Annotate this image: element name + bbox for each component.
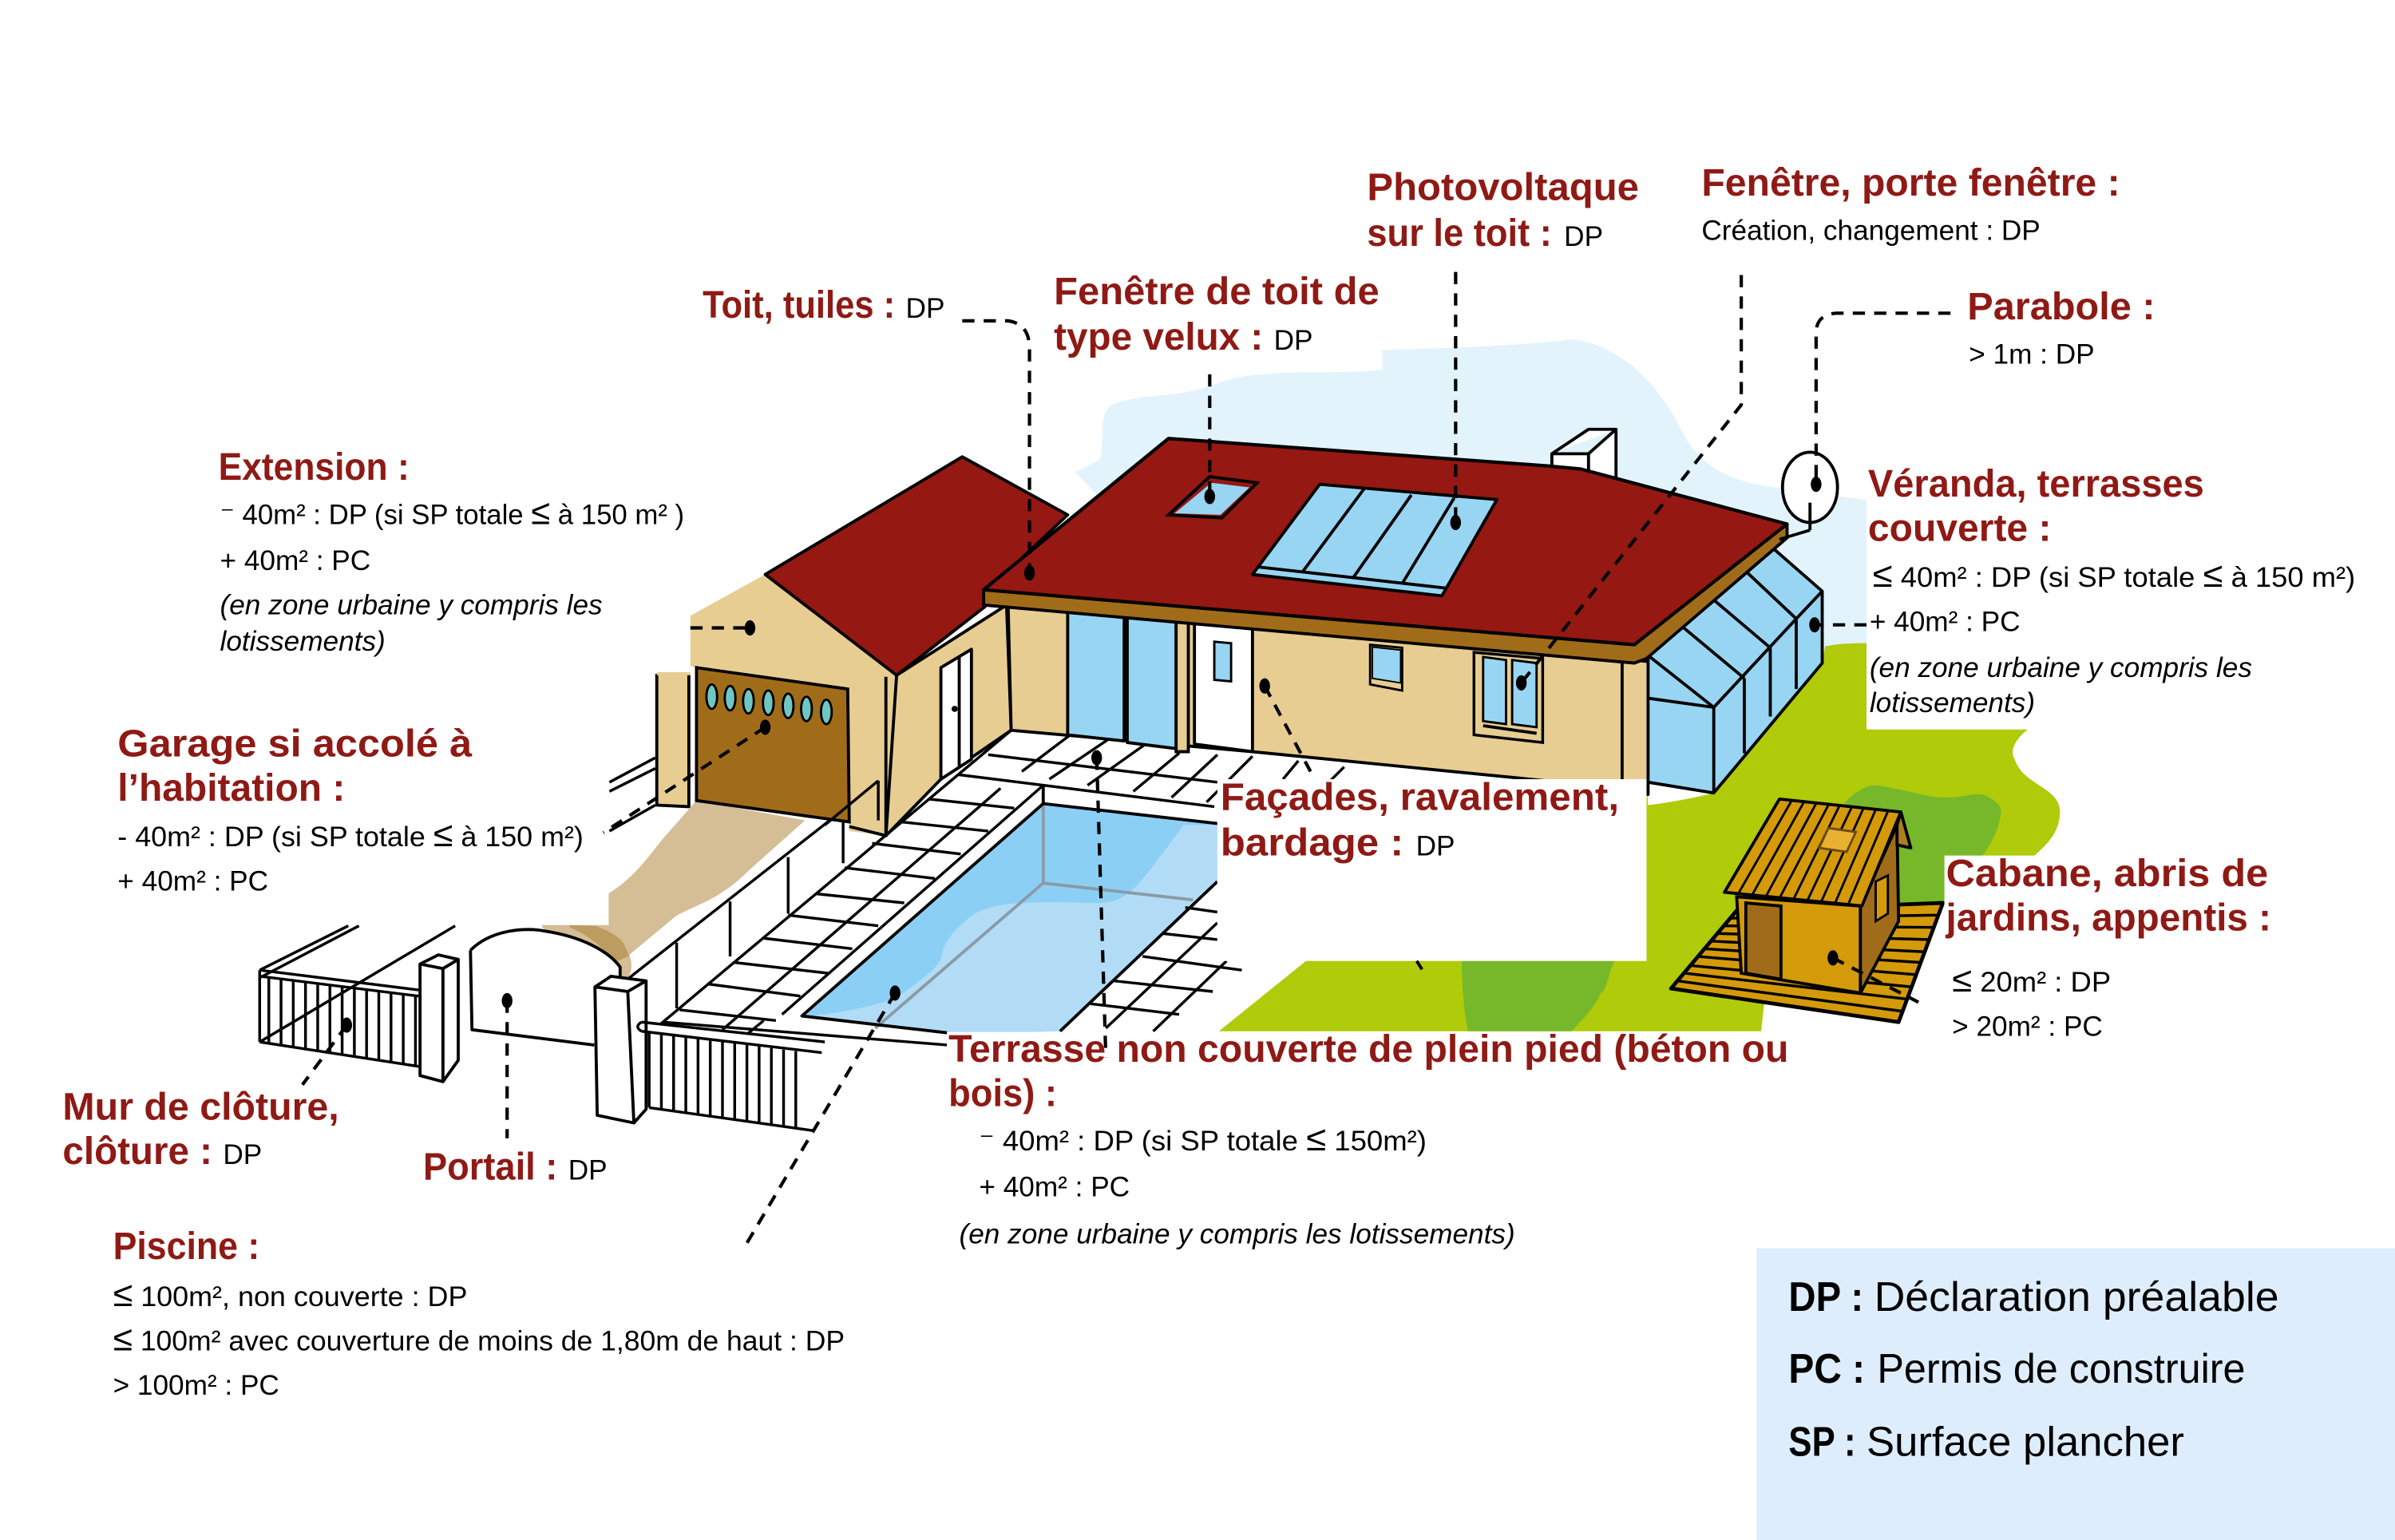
left post (420, 955, 458, 1082)
label: Piscine: Piscine : (113, 1225, 259, 1268)
label: Mur de clôture (62, 1087, 339, 1173)
garage door (696, 667, 849, 822)
label: Garage: Garage si accolé à (117, 722, 473, 765)
label: Façades: DP (1416, 831, 1455, 862)
satellite dish (1779, 452, 1838, 540)
main roof fascia (984, 524, 1787, 663)
label: Véranda: + 40m² : PC (1870, 606, 2021, 637)
label: Extension (219, 446, 684, 657)
label: Véranda: Véranda, terrasses (1868, 463, 2204, 505)
small window (1370, 645, 1402, 691)
right post (595, 976, 646, 1123)
label: Mur de clôture: clôture : (62, 1130, 212, 1173)
garage roof (766, 457, 1067, 675)
label: Véranda (1868, 463, 2355, 719)
low wall corner (825, 781, 878, 825)
label: Extension: ⁻ 40m² : DP (si SP totale ≤ à 150 m² ) (220, 493, 684, 532)
label: Velux: DP (1274, 325, 1313, 356)
label: Fenêtre: Fenêtre, porte fenêtre : (1701, 162, 2120, 204)
label: Portail: DP (568, 1154, 608, 1186)
label: Photovoltaïque: Photovoltaque (1367, 167, 1639, 209)
label: Terrasse: + 40m² : PC (979, 1171, 1130, 1202)
label: Velux: Fenêtre de toit de (1054, 271, 1380, 313)
legend DP: Déclaration préalable (1874, 1273, 2279, 1320)
label: Terrasse: bois) : (948, 1073, 1057, 1115)
label: Cabane: jardins, appentis : (1946, 897, 2271, 939)
right side paving (1091, 908, 1241, 1031)
label: Piscine (113, 1225, 845, 1401)
label: Véranda: ≤ 40m² : DP (si SP totale ≤ à 150 m²) (1873, 556, 2355, 595)
label: Photovoltaïque: DP (1564, 221, 1603, 252)
white mask left of driveway (458, 764, 608, 925)
label: Mur de clôture: Mur de clôture, (62, 1087, 339, 1129)
label: Façades: bardage : (1221, 822, 1403, 865)
left fence (259, 926, 455, 1067)
label: Extension: Extension : (219, 446, 410, 489)
darker lawn patches (1462, 786, 2001, 1031)
big window (1474, 652, 1542, 742)
label: Parabole: Parabole : (1967, 286, 2156, 328)
chimney (1552, 430, 1616, 492)
garden shed (1671, 799, 1943, 1022)
label: Photovoltaïque (1367, 167, 1639, 255)
label: Cabane: > 20m² : PC (1952, 1011, 2103, 1042)
legend SP: SP : (1788, 1419, 1856, 1465)
veranda (1648, 548, 1823, 793)
label: Garage: l’habitation : (117, 767, 345, 810)
low wall along path (629, 782, 878, 1008)
label: Terrasse: (en zone urbaine y compris les lotissements) (960, 1219, 1515, 1250)
label: Mur de clôture: DP (223, 1139, 262, 1170)
label: Piscine: > 100m² : PC (113, 1370, 279, 1401)
garage side post (657, 674, 689, 806)
label: Toit: DP (906, 293, 944, 324)
legend DP: DP : (1788, 1273, 1863, 1320)
label: Cabane: Cabane, abris de (1946, 853, 2268, 895)
front door (1194, 622, 1253, 752)
label: Parabole: > 1m : DP (1969, 338, 2095, 370)
legend PC: PC : (1788, 1345, 1865, 1392)
label: Velux (1054, 271, 1380, 358)
label: Cabane: ≤ 20m² : DP (1952, 960, 2111, 1000)
shed walls (1736, 897, 1860, 993)
label: Terrasse (948, 1028, 1788, 1250)
label: Velux: type velux : (1054, 316, 1263, 358)
label: Extension: + 40m² : PC (220, 545, 370, 576)
gate arch and opening (470, 929, 620, 1045)
right fence (638, 1022, 825, 1130)
label: Garage (117, 722, 584, 897)
house wall (1008, 605, 1648, 794)
label: Fenêtre (1701, 162, 2120, 246)
solar panels (1253, 485, 1497, 596)
house (984, 430, 1823, 794)
white text backgrounds (947, 466, 2395, 1261)
label: Garage: - 40m² : DP (si SP totale ≤ à 150 m²) (117, 815, 584, 854)
label: Véranda: couverte : (1868, 507, 2052, 549)
side road lines (609, 758, 655, 831)
label: Photovoltaïque: sur le toit : (1367, 212, 1552, 255)
door windows (707, 684, 832, 724)
label: Toit: Toit, tuiles : (703, 284, 895, 327)
roof window velux (1169, 477, 1257, 518)
label: Cabane (1946, 853, 2271, 1042)
label: Extension: (en zone urbaine y compris les (220, 589, 603, 620)
side door (941, 649, 972, 779)
driveway (540, 801, 805, 978)
label: Portail: Portail : (423, 1146, 557, 1188)
label: Piscine: ≤ 100m², non couverte : DP (113, 1275, 467, 1314)
label: Parabole (1967, 286, 2156, 370)
shed deck (1671, 903, 1943, 1022)
legend SP: Surface plancher (1867, 1419, 2184, 1465)
front terrace paving (663, 730, 1344, 1045)
shed roof (1897, 812, 1910, 848)
glass doors (1067, 611, 1124, 741)
sky background shape (1075, 339, 1894, 734)
legend PC: Permis de construire (1877, 1345, 2245, 1392)
lawn (1219, 643, 2060, 1031)
label: Piscine: ≤ 100m² avec couverture de moins de 1,80m de haut : DP (113, 1320, 845, 1359)
label: Garage: + 40m² : PC (117, 866, 268, 897)
label: Terrasse: Terrasse non couverte de plein pied (béton ou (948, 1028, 1788, 1071)
main roof (984, 438, 1787, 645)
label: Façades (1221, 776, 1619, 865)
label: Véranda: (en zone urbaine y compris les (1870, 652, 2252, 683)
label: Terrasse: ⁻ 40m² : DP (si SP totale ≤ 150m²) (979, 1119, 1427, 1158)
label: Fenêtre: Création, changement : DP (1701, 215, 2041, 246)
label: Véranda: lotissements) (1870, 687, 2035, 719)
leader lines (303, 272, 1950, 1248)
label: Extension: lotissements) (220, 626, 386, 657)
label: Façades: Façades, ravalement, (1221, 776, 1619, 818)
garage (657, 457, 1067, 836)
swimming pool (802, 786, 1217, 1035)
legend panel (1756, 1248, 2395, 1540)
